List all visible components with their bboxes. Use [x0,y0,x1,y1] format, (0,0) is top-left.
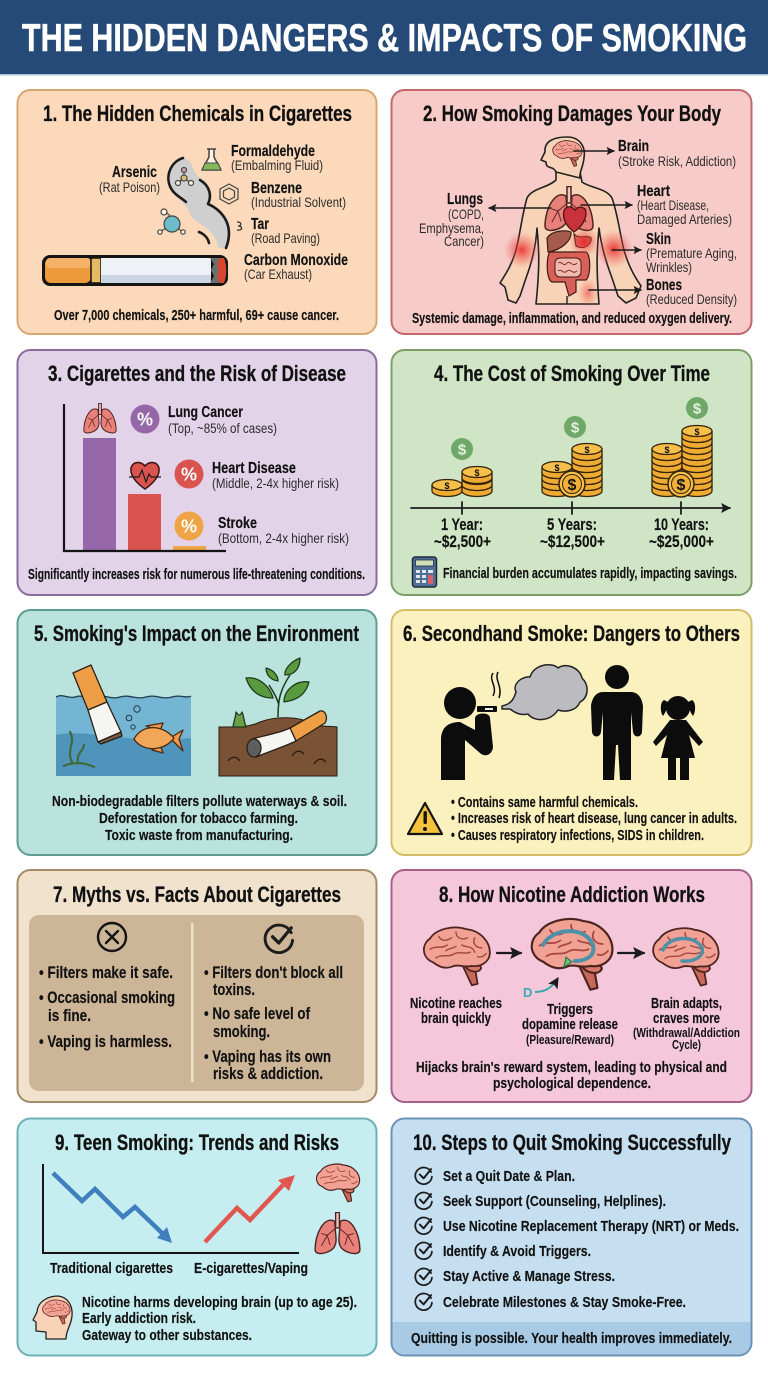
icon: flask [202,149,221,170]
text block: Toxic waste from manufacturing. [105,828,293,844]
label: lungs: (COPD, [448,206,484,222]
icon: percent purple: % [137,410,153,430]
step 2: Seek Support (Counseling, Helplines). [443,1194,666,1210]
icon: dollar 3: $ [693,400,702,418]
label: 5 years: ~$12,500+ [540,532,605,551]
caption: step 3: craves more [653,1011,720,1027]
step 4: Identify & Avoid Triggers. [443,1244,591,1260]
heading: panel 5: 5. Smoking's Impact on the Environment [34,621,360,646]
label: heart disease: (Middle, 2-4x higher risk) [212,475,339,491]
organ: liver [547,231,571,252]
label: bones: Bones [646,277,682,294]
label: stroke: Stroke [218,515,257,532]
label: formaldehyde [231,143,323,173]
label: heart disease: Heart Disease [212,460,296,477]
myths list: • Filters make it safe. [39,963,173,982]
label: 1 year: ~$2,500+ [434,532,491,551]
organ: lungs [545,186,593,230]
cigarette [42,255,228,286]
label: lungs [419,191,484,249]
bullet list: • Contains same harmful chemicals. [451,795,638,811]
icon: dollar 1 [451,438,473,460]
label: 5 years [540,515,605,551]
body figure [500,137,641,308]
inflammation glows [504,227,633,308]
caption: step 1 [410,996,502,1027]
step 4 [415,1242,591,1260]
coins: 5 years [542,444,602,497]
icon: calculator [412,557,436,587]
facts list: • No safe level of [204,1004,310,1023]
smoke plume [168,158,230,248]
label: benzene: (Industrial Solvent) [251,194,346,210]
caption: step 3: Cycle) [672,1037,701,1052]
panel: risk of disease [18,350,376,595]
label: benzene [251,180,346,210]
figure: child [653,696,703,780]
arrow: brain [574,150,614,152]
text block: Early addiction risk. [82,1311,196,1327]
text block: Deforestation for tobacco farming. [99,811,298,827]
step 1: Set a Quit Date & Plan. [443,1169,575,1185]
label: heart: (Heart Disease, [637,197,709,213]
label: 10 years: 10 Years: [654,515,709,534]
arrow: skin [612,249,641,251]
label: lung cancer [168,404,277,436]
trend: traditional cigarettes [53,1173,172,1243]
arrow: bones [589,289,641,291]
smoke wisps [492,672,500,698]
coins: 10 years: $ [664,445,670,455]
illustration: butt in soil [219,658,337,776]
label: arsenic [99,164,160,195]
label: 1 year [434,515,491,551]
label: carbon monoxide [244,252,348,282]
facts list: • Vaping has its own [204,1047,331,1066]
coins: 10 years: $ [677,477,686,494]
arrow: heart [581,204,632,206]
icon: warning [408,803,442,834]
soil butt [247,711,326,757]
heading: panel 9: 9. Teen Smoking: Trends and Risks [55,1130,339,1155]
label: 10 years: ~$25,000+ [649,532,714,551]
label: 1 year: 1 Year: [441,515,483,534]
label: heart disease [212,460,339,491]
text block: Gateway to other substances. [82,1328,252,1344]
footer band [392,1322,750,1354]
icon: carbon monoxide molecule [158,209,185,234]
illustration: butt in water [56,665,191,776]
icon: brain 3 with pathway [653,928,719,986]
icon: dollar 2 [564,416,586,438]
caption: step 3: Brain adapts, [651,996,722,1012]
myths list: • Vaping is harmless. [39,1032,172,1051]
figure: smoker [441,687,497,780]
coins: 1 year: $ [474,468,480,478]
label: brain [618,138,736,169]
axis labels: E-cigarettes/Vaping [194,1261,308,1277]
label: formaldehyde: Formaldehyde [231,143,315,160]
caption: step 2: (Pleasure/Reward) [526,1032,614,1047]
panel: hidden chemicals [18,90,376,334]
label: skin: (Premature Aging, [646,245,737,261]
panel: teen smoking [18,1118,376,1356]
seaweed [64,732,94,767]
label: 10 years [649,515,714,551]
icon: percent orange: % [181,516,197,536]
title banner [0,0,768,76]
line chart [43,1164,299,1253]
text block [52,794,347,844]
label: lungs: Lungs [447,191,483,208]
label: lung cancer: Lung Cancer [168,404,243,421]
caption: step 3: (Withdrawal/Addiction [633,1025,740,1040]
facts list [204,963,343,1083]
facts list: risks & addiction. [213,1064,323,1083]
summary text [416,1060,727,1092]
icon: percent orange [174,512,204,540]
text block: Nicotine harms developing brain (up to age 25). [82,1295,357,1311]
icon: brain 2 with pathway: D [523,985,532,1000]
bullet list [451,795,737,844]
caption: step 2: Triggers [547,1002,593,1018]
label: formaldehyde: (Embalming Fluid) [231,157,323,173]
arrow: lungs [489,207,551,209]
smoke cloud [502,665,587,720]
caption: step 2: dopamine release [522,1017,618,1033]
organ: stomach [574,234,591,248]
label: carbon monoxide: (Car Exhaust) [244,266,312,282]
bar chart [64,404,226,551]
facts list: toxins. [213,980,255,999]
icon: dollar 1: $ [458,442,467,458]
organ: brain [553,141,582,166]
icon: brain 1 [424,927,490,985]
label: stroke: (Bottom, 2-4x higher risk) [218,530,349,546]
facts list: smoking. [213,1022,270,1041]
comparison box [29,915,364,1091]
icon: dollar 3 [686,397,708,419]
myths list [39,963,175,1051]
heading: panel 1: 1. The Hidden Chemicals in Cigarettes [43,101,352,126]
coins: 10 years: $ [694,427,700,437]
icon: dollar 2: $ [571,420,580,436]
facts list: • Filters don't block all [204,963,343,982]
label: skin: Skin [646,231,671,248]
label: arsenic: (Rat Poison) [99,179,160,195]
label: heart: Damaged Arteries) [637,211,732,227]
label: lung cancer: (Top, ~85% of cases) [168,420,277,436]
icon: cross [98,923,126,951]
fish [134,723,183,753]
icon: percent purple [130,404,160,434]
panel: environment [18,610,376,855]
axis labels: Traditional cigarettes [50,1261,173,1277]
icon: tar squiggle [237,222,242,230]
organ: intestines [547,252,590,296]
panel: secondhand smoke [392,610,752,855]
butt [73,665,122,744]
summary text: Over 7,000 chemicals, 250+ harmful, 69+ cause cancer. [54,308,339,324]
icon: arsenic molecule [176,168,194,186]
icon: lungs [84,403,116,433]
step 6: Celebrate Milestones & Stay Smoke-Free. [443,1295,686,1311]
coins: 5 years: $ [554,463,560,473]
caption: step 1: brain quickly [421,1011,491,1027]
soil marks [228,751,326,764]
icon: benzene ring [220,184,238,204]
label: tar [251,216,320,246]
panel: body damage [392,90,752,334]
text block: Non-biodegradable filters pollute waterways & soil. [52,794,347,810]
axis labels [50,1261,308,1277]
label: carbon monoxide: Carbon Monoxide [244,252,348,269]
label: heart [637,183,732,227]
label: tar: Tar [251,216,269,233]
icon: percent red: % [181,464,197,484]
label: brain: Brain [618,138,649,155]
icon: head with brain [33,1296,72,1339]
coins: 5 years: $ [568,477,577,494]
panel: myths vs facts [18,870,376,1102]
label: tar: (Road Paving) [251,230,320,246]
icon: lungs [315,1212,360,1254]
icon: percent red [174,460,204,488]
coins: 1 year [432,466,492,496]
step 1 [415,1167,575,1185]
myths list: • Occasional smoking [39,988,175,1007]
label: 5 years: 5 Years: [547,515,597,534]
heading: panel 3: 3. Cigarettes and the Risk of Disease [48,361,346,386]
plant [233,658,309,727]
timeline arrow [411,502,730,514]
caption: step 1: Nicotine reaches [410,996,502,1012]
label: skin: Wrinkles) [646,259,692,275]
caption: step 3 [633,996,740,1052]
panel: steps to quit [392,1118,752,1356]
icon: brain [317,1164,360,1202]
icon: check [265,925,293,953]
coins: 5 years: $ [584,445,590,455]
caption: step 2 [522,1002,618,1047]
coins: 10 years [652,426,712,497]
summary text: Significantly increases risk for numerous life-threatening conditions. [28,567,365,583]
label: heart: Heart [637,183,670,200]
arrow [497,952,521,954]
text block [82,1295,357,1344]
label: skin [646,231,737,275]
label: bones: (Reduced Density) [646,291,737,307]
summary text: psychological dependence. [493,1076,651,1092]
label: bones [646,277,737,307]
label: benzene: Benzene [251,180,302,197]
heading: panel 7: 7. Myths vs. Facts About Cigarettes [53,882,341,907]
figure: adult [591,665,643,780]
panel: cost over time [392,350,752,595]
arrow [618,952,644,954]
icon: heart with pulse [129,462,161,489]
label: brain: (Stroke Risk, Addiction) [618,153,736,169]
trend: e-cigarettes [205,1175,295,1242]
myths list: is fine. [48,1006,91,1025]
organ: heart [563,207,586,232]
label: lungs: Cancer) [444,233,484,249]
label: lungs: Emphysema, [419,220,484,236]
step 5: Stay Active & Manage Stress. [443,1269,615,1285]
bubbles [126,706,140,729]
icon: brain 2 with pathway [523,919,612,1000]
label: stroke [218,515,349,546]
label: arsenic: Arsenic [112,164,157,181]
panel: nicotine addiction [392,870,752,1102]
coins: 1 year: $ [444,481,450,491]
